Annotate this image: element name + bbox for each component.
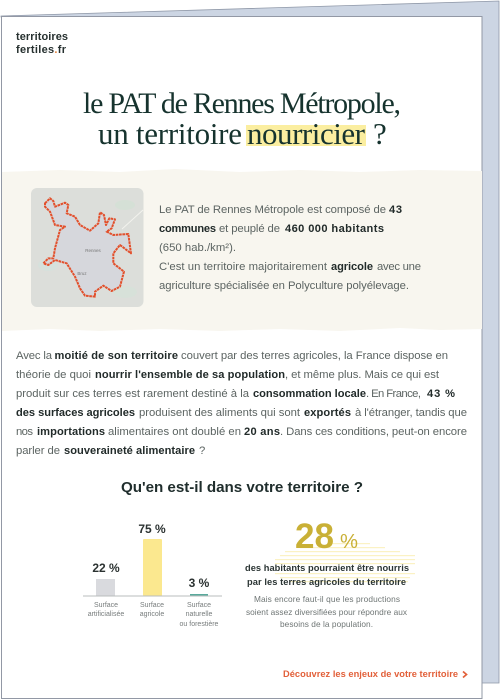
bar: surface naturelle: naturelle [186,611,213,618]
panel background [2,169,482,331]
intro paragraph: moitié de son territoire [54,350,178,362]
bar: surface artificialisée [88,561,124,618]
title highlight [246,125,366,146]
panel: territory summary: 460 000 habitants [285,223,384,235]
figure caption [245,563,409,587]
map labels: Bruz [77,271,87,276]
bar: surface agricole: 75 % [138,522,166,536]
figure caption: des habitants pourraient être nourris [245,563,409,573]
intro paragraph: alimentaires ont doublé en [108,426,241,438]
summary text: Le PAT de Rennes Métropole est composé de [159,204,386,216]
bar: surface naturelle: ou forestière [180,621,219,628]
intro paragraph [16,350,467,457]
intro paragraph: parler de [16,445,60,457]
intro paragraph: importations [37,426,105,438]
icon: chevron [463,672,466,678]
panel: territory summary: communes [159,223,216,235]
figure note [246,594,408,629]
intro paragraph: consommation locale [253,388,366,400]
bar: surface artificialisée: Surface [94,602,118,609]
intro paragraph: exportés [304,407,351,419]
figure note: Mais encore faut-il que les productions [254,594,400,604]
panel: territory summary: avec une [377,261,421,273]
figure: 28 [295,517,334,556]
panel: territory summary [2,169,482,331]
summary text: 43 [389,204,402,216]
intro paragraph: souveraineté alimentaire [64,445,195,457]
territory outline [43,198,131,297]
figure caption: par les terres agricoles du territoire [247,577,406,587]
bar chart [83,522,222,628]
decorative hatching [275,543,415,582]
bar: surface artificialisée: 22 % [92,561,120,575]
title text: ? [373,116,387,151]
intro paragraph: nos [16,426,33,438]
intro paragraph: 43 % [427,388,455,400]
figure note: soient assez diversifiées pour répondre aux [246,607,408,617]
panel: territory summary: agricole [331,261,373,273]
bar: surface agricole: Surface [140,602,164,609]
intro paragraph: théorie de quoi [16,369,91,381]
logo [16,31,68,56]
intro paragraph: produit sur ces terres est rarement destiné à la [16,388,250,400]
intro paragraph: Avec la [16,350,53,362]
logo: territoires [16,31,68,43]
call to action link: Découvrez les enjeux de votre territoire [283,669,458,679]
panel: territory summary: agriculture spécialisée en Polyculture polyélevage. [159,280,409,292]
bar: surface agricole [138,522,166,618]
section heading: Qu'en est-il dans votre territoire ? [121,479,363,496]
map [31,188,144,307]
intro paragraph: , et même plus. Mais ce qui est [285,369,440,381]
map labels [77,248,102,276]
bar: surface agricole: agricole [140,611,164,618]
key figure: 28 %: % [340,531,358,553]
intro paragraph: nourrir l'ensemble de sa population [95,369,285,381]
bar: surface naturelle [180,576,219,628]
panel: territory summary: C'est un territoire majoritairement [159,261,328,273]
intro paragraph: ? [199,445,205,457]
key figure: 28 % [245,517,415,629]
title [83,87,401,151]
logo: fertiles.fr [16,44,67,56]
intro paragraph: des surfaces agricoles [16,407,135,419]
title text [83,87,401,151]
intro paragraph: couvert par des terres agricoles, la France dispose en [181,350,448,362]
intro paragraph: . En France, [366,388,421,400]
intro paragraph: à l'étranger, tandis que [355,407,467,419]
map labels: Rennes [85,248,102,253]
intro paragraph: . Dans ces conditions, peut-on encore [280,426,467,438]
title text: nourricier [247,116,366,151]
map base [31,188,144,307]
panel: territory summary: (650 hab./km²). [159,242,236,254]
title text: un territoire [98,116,242,151]
bar: surface naturelle: Surface [187,602,211,609]
intro paragraph: 20 ans [244,426,280,438]
bar: surface naturelle: 3 % [189,576,210,590]
panel: territory summary: et peuplé de [219,223,280,235]
figure note: besoins de la population. [280,619,373,629]
title text: le PAT de Rennes Métropole, [83,87,401,120]
bar: surface artificialisée: artificialisée [88,611,124,618]
intro paragraph: produisent des aliments qui sont [139,407,301,419]
